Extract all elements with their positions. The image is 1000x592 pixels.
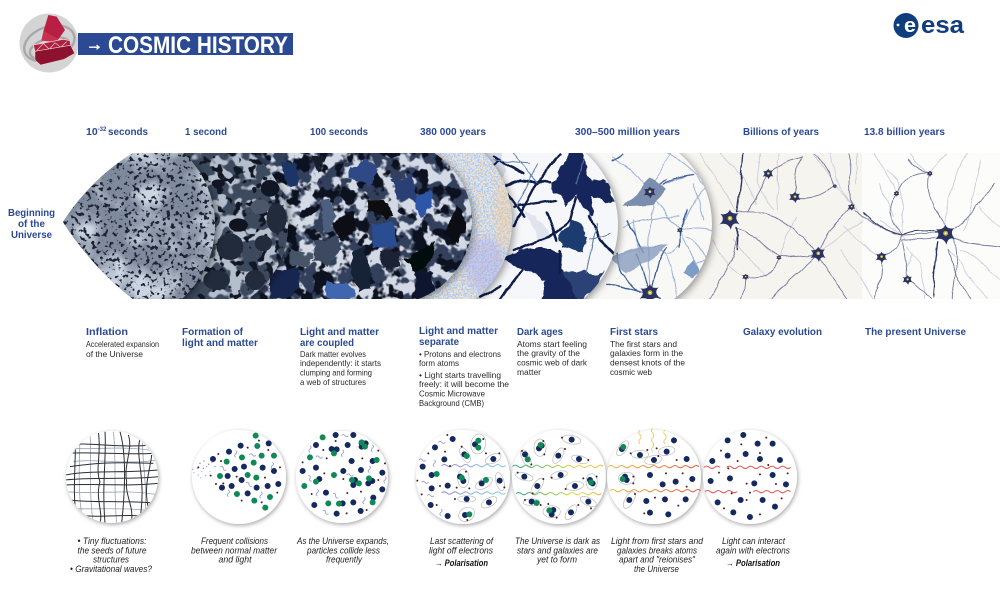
stage: dark ages: Dark ages (517, 326, 563, 338)
stage: light and matter are coupled (300, 326, 381, 387)
band section: first stars disc (590, 153, 719, 299)
band section: formation of light and matter disc (182, 153, 294, 299)
caption: light interacts again: → Polarisation (726, 558, 780, 568)
caption: frequent collisions (191, 536, 278, 564)
diagram: tiny fluctuations grid (65, 431, 158, 523)
stage: dark ages: the gravity of the (517, 348, 580, 358)
diagram: dark ages universe (512, 430, 606, 524)
stage: the present universe: The present Universe (865, 326, 966, 338)
caption: light interacts again: Light can interact (722, 536, 786, 546)
caption: last scattering (429, 536, 494, 568)
cosmic history band (63, 153, 1000, 299)
stage: dark ages: cosmic web of dark (517, 358, 588, 368)
stage: formation of light and matter: light and matter (182, 337, 258, 349)
caption: frequent collisions: Frequent collisions (201, 536, 269, 546)
stage: inflation (86, 326, 159, 359)
caption: tiny fluctuations: • Gravitational waves? (70, 564, 152, 574)
caption: particles collide less: As the Universe expands, (296, 536, 389, 546)
timeline labels: 100 seconds (310, 126, 368, 138)
caption: tiny fluctuations: • Tiny fluctuations: (78, 536, 147, 546)
caption: light interacts again: again with electrons (716, 546, 791, 556)
timeline labels (86, 126, 945, 138)
diagram: reionisation (607, 428, 701, 524)
timeline labels: 1 second (185, 126, 227, 138)
caption: last scattering: light off electrons (429, 546, 494, 556)
esa logo: e (904, 15, 916, 37)
stage: inflation: Inflation (86, 326, 128, 338)
stage: dark ages: matter (517, 367, 541, 377)
diagram: last scattering (416, 430, 510, 524)
beginning of the universe label: of the (18, 218, 45, 230)
stage: first stars (610, 326, 685, 377)
stage: dark ages: Atoms start feeling (517, 339, 587, 349)
stage: first stars: densest knots of the (610, 358, 685, 368)
diagram: light interacts again (703, 430, 797, 524)
caption: particles collide less (296, 536, 389, 564)
band section: inflation disc (63, 153, 222, 299)
stage: formation of light and matter: Formation of (182, 326, 243, 338)
caption: reionisation: the Universe (634, 564, 679, 574)
caption: reionisation: apart and "reionises" (619, 554, 696, 564)
timeline labels: seconds (108, 126, 148, 138)
timeline labels: 300–500 million years (575, 126, 680, 138)
band section: dark ages disc (479, 153, 625, 299)
caption: last scattering: Last scattering of (430, 536, 494, 546)
band section: cosmic microwave background disc (419, 153, 519, 299)
title banner: → (86, 35, 103, 54)
timeline labels: 13.8 billion years (864, 126, 945, 138)
diagram: particles collide less (296, 431, 388, 523)
stage: first stars: galaxies form in the (610, 348, 683, 358)
beginning of the universe label (8, 207, 55, 241)
caption: last scattering: → Polarisation (435, 558, 488, 568)
timeline labels: 380 000 years (420, 126, 486, 138)
caption: particles collide less: particles collide less (306, 546, 381, 556)
stage: first stars: cosmic web (610, 367, 652, 377)
stage: light and matter are coupled: Light and matter (300, 326, 379, 338)
stage: light and matter separate: Light and matter (419, 325, 498, 337)
stage: formation of light and matter (182, 326, 258, 349)
timeline labels: Billions of years (743, 126, 819, 138)
caption: dark ages universe: stars and galaxies are (517, 546, 598, 556)
stage: light and matter separate: • Light starts travelling (419, 370, 501, 380)
beginning of the universe label: Universe (11, 229, 52, 241)
caption: tiny fluctuations (70, 536, 152, 574)
stage: light and matter are coupled: are coupled (300, 337, 354, 349)
caption: dark ages universe (515, 536, 601, 564)
caption: tiny fluctuations: the seeds of future (78, 546, 147, 556)
stage: light and matter are coupled: independently: it starts (300, 358, 381, 368)
timeline labels: -32 (98, 127, 107, 133)
stage: light and matter separate: Background (CMB) (419, 398, 484, 408)
beginning of the universe label: Beginning (8, 207, 55, 219)
stage: first stars: The first stars and (610, 339, 677, 349)
stage: light and matter are coupled: Dark matter evolves (300, 349, 366, 359)
caption: dark ages universe: yet to form (536, 554, 577, 564)
caption: reionisation (611, 536, 704, 574)
stage: light and matter separate: freely: it will become the (419, 379, 509, 389)
stage: light and matter are coupled: a web of structures (300, 377, 366, 387)
band section: light and matter coupled disc (248, 153, 479, 299)
caption: reionisation: galaxies breaks atoms (617, 546, 698, 556)
timeline labels: 10 (86, 126, 98, 138)
stage: inflation: of the Universe (86, 349, 143, 359)
mission emblem: telescope (19, 14, 79, 72)
stage: galaxy evolution: Galaxy evolution (743, 326, 822, 338)
stage: light and matter are coupled: clumping and forming (300, 368, 372, 378)
band section: present universe and galaxy evolution (674, 153, 1000, 299)
stage: inflation: Accelerated expansion (86, 339, 159, 349)
stage: light and matter separate: • Protons and electrons (419, 349, 501, 359)
caption: particles collide less: frequently (326, 554, 363, 564)
stage: light and matter separate (419, 325, 509, 408)
diagram: frequent collisions (192, 430, 286, 524)
stage: light and matter separate: form atoms (419, 358, 459, 368)
esa logo (894, 12, 965, 39)
esa logo: esa (921, 12, 965, 39)
caption: frequent collisions: between normal matter (191, 546, 278, 556)
stage: light and matter separate: separate (419, 336, 459, 348)
stage: dark ages (517, 326, 588, 377)
caption: reionisation: Light from first stars and (611, 536, 704, 546)
galaxy knots (720, 169, 955, 285)
caption: tiny fluctuations: structures (93, 554, 130, 564)
caption: dark ages universe: The Universe is dark as (515, 536, 601, 546)
title banner: COSMIC HISTORY (108, 32, 288, 59)
stage: light and matter separate: Cosmic Microwave (419, 388, 485, 398)
stage: first stars: First stars (610, 326, 658, 338)
caption: light interacts again (716, 536, 791, 568)
caption: frequent collisions: and light (218, 554, 252, 564)
